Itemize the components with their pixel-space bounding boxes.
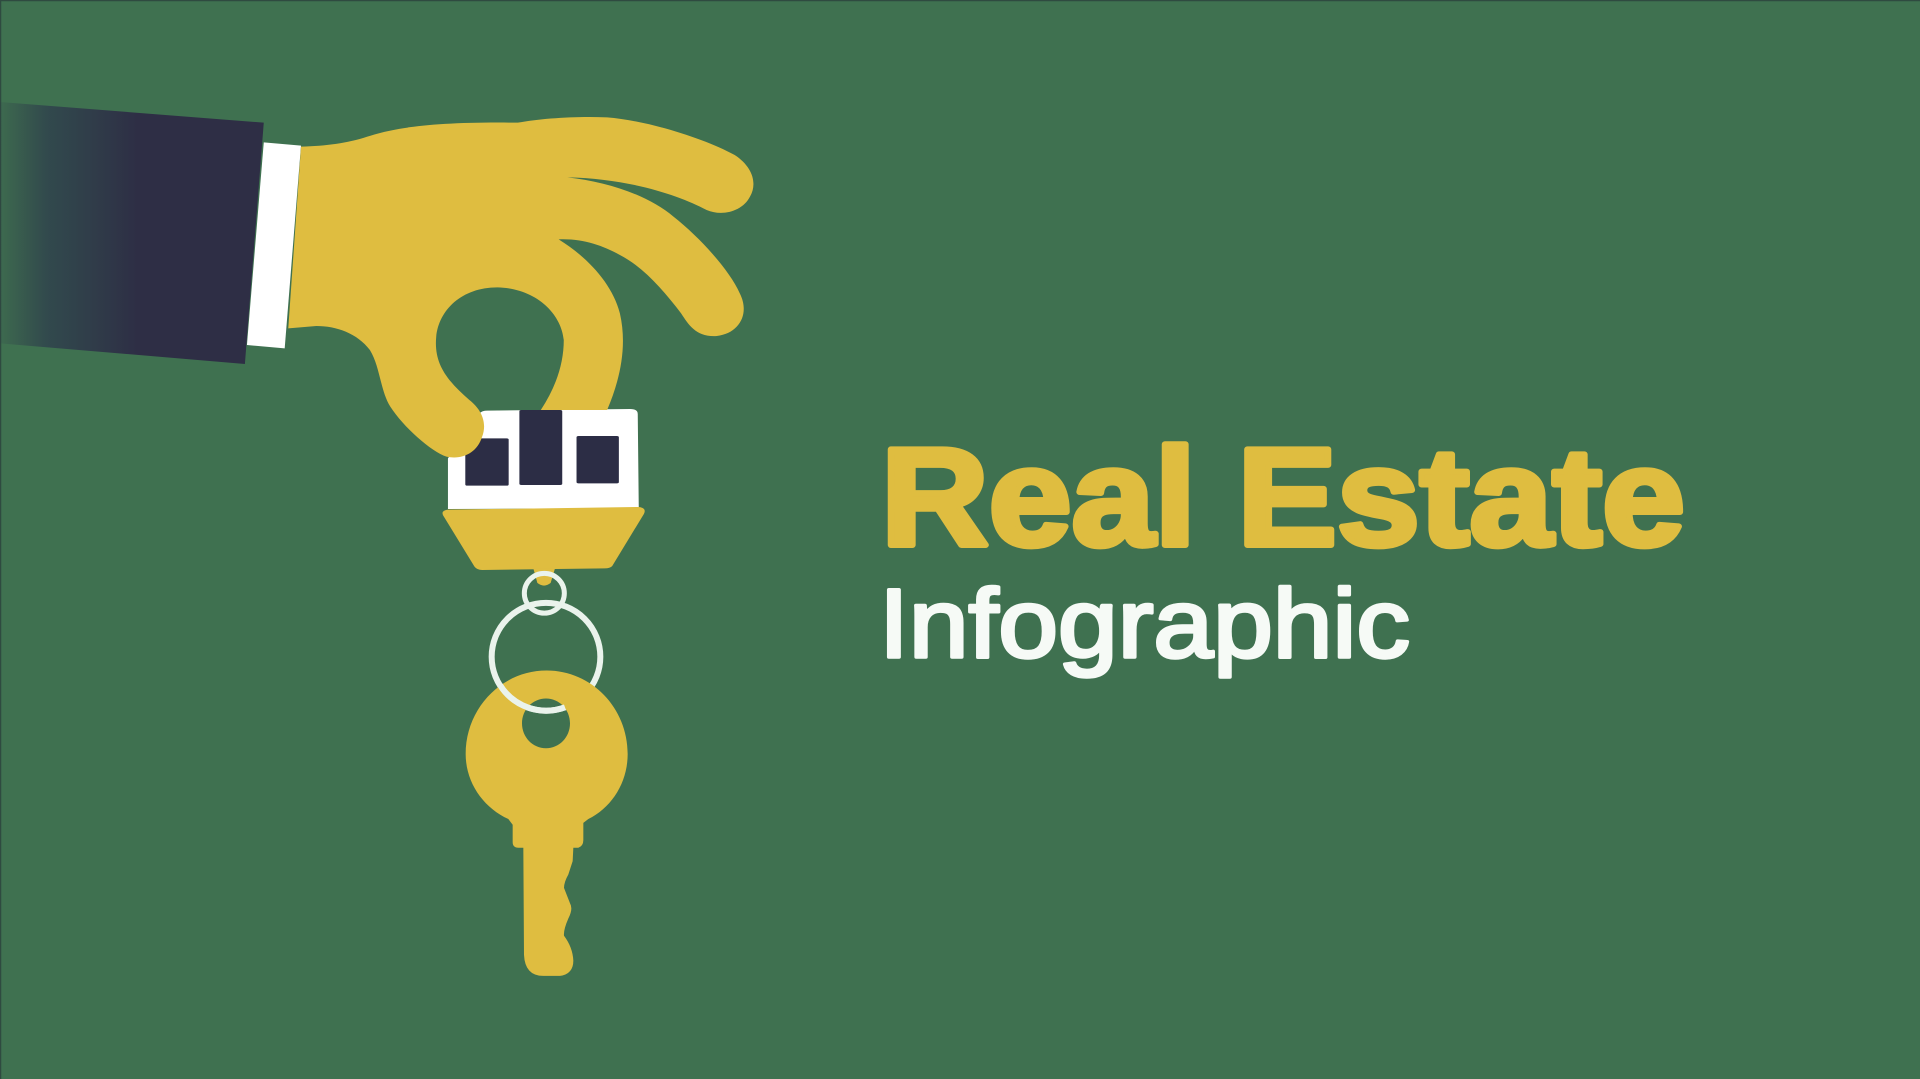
illustration: hand holding house keychain [0,102,753,976]
subtitle: Infographic: Infographic [879,569,1410,678]
house keychain [443,409,645,570]
key [466,671,628,976]
hand [288,117,753,457]
house windows [465,410,619,486]
sleeve [0,102,264,364]
house base [443,507,645,570]
ring passing over key [500,685,565,711]
connector nub [533,568,555,586]
small ring [524,573,564,613]
title: Real Estate: Real Estate [881,420,1685,575]
house walls [448,409,639,509]
large ring [492,603,600,711]
key and rings [466,568,628,976]
arm and hand [0,102,753,570]
shirt cuff [247,142,301,348]
